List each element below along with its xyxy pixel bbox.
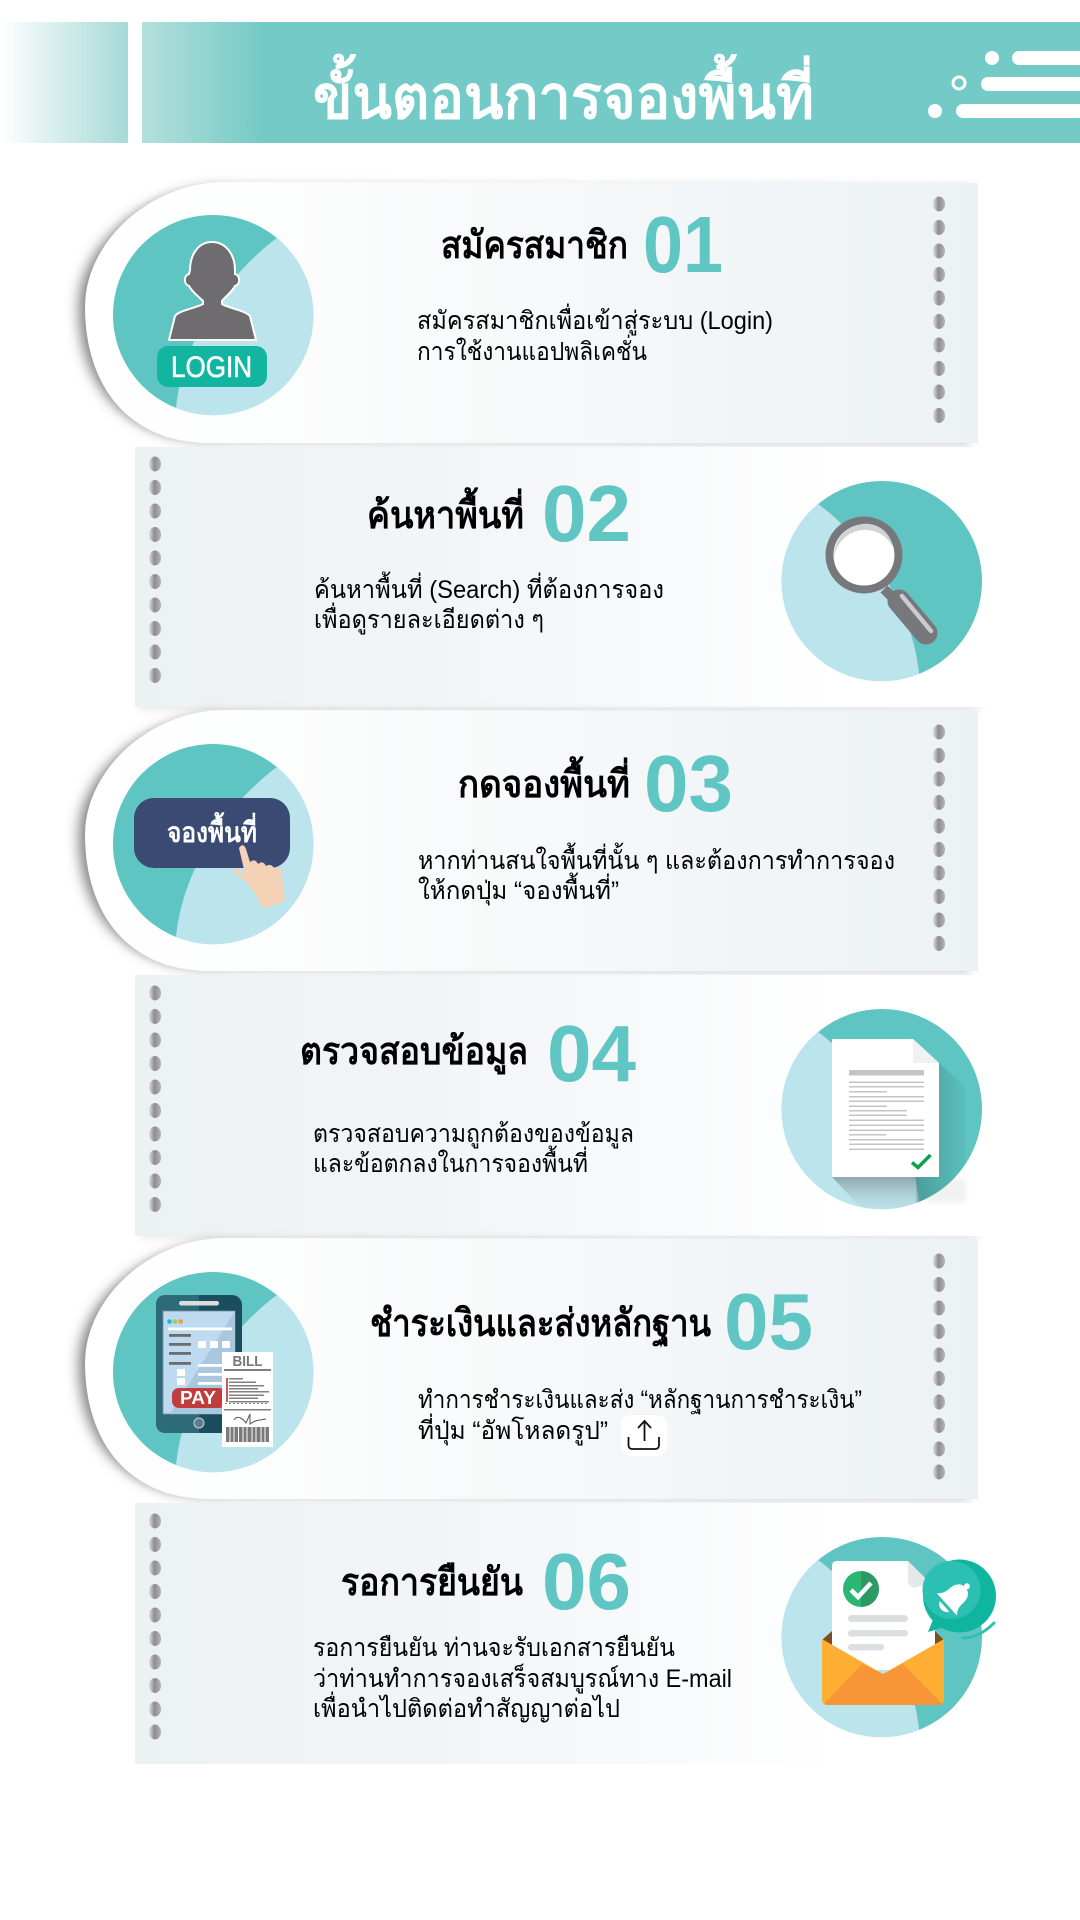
icon: magnifier	[781, 481, 982, 681]
body text 04: ตรวจสอบความถูกต้องของข้อมูล	[313, 1120, 634, 1149]
body text 06	[313, 1634, 732, 1723]
body text 04: และข้อตกลงในการจองพื้นที่	[313, 1145, 588, 1178]
phone: PAY	[180, 1388, 216, 1408]
body text 02: ค้นหาพื้นที่ (Search) ที่ต้องการจอง	[314, 571, 664, 604]
card 6 background	[135, 1503, 990, 1764]
body text 01	[417, 303, 773, 366]
card 3 binder holes	[933, 724, 945, 951]
heading 02: ค้นหาพื้นที่	[367, 487, 524, 537]
heading 03: กดจองพื้นที่	[458, 756, 630, 806]
card 4 binder holes	[149, 986, 161, 1212]
body text 01: สมัครสมาชิกเพื่อเข้าสู่ระบบ (Login)	[417, 303, 773, 336]
bill	[222, 1352, 273, 1447]
panel: step 05	[78, 1238, 978, 1502]
phone	[156, 1295, 242, 1433]
panel: step 02	[135, 447, 990, 710]
header banner	[0, 22, 1080, 143]
icon: decorative list	[928, 51, 1080, 118]
icon: upload	[621, 1415, 667, 1456]
card 1 binder holes	[933, 196, 945, 423]
bill: BILL	[232, 1353, 262, 1370]
panel: step 01	[78, 182, 978, 446]
icon: phone payment and bill	[113, 1272, 314, 1472]
heading 06: รอการยืนยัน	[341, 1562, 523, 1604]
number 05: 05	[724, 1277, 813, 1366]
icon: booking button with hand	[113, 744, 314, 944]
card 3 background	[78, 710, 978, 974]
bell badge	[922, 1560, 996, 1638]
card 6 binder holes	[149, 1514, 161, 1740]
body text 03: หากท่านสนใจพื้นที่นั้น ๆ และต้องการทำการจอง	[418, 842, 895, 875]
body text 06: เพื่อนำไปติดต่อทำสัญญาต่อไป	[313, 1691, 620, 1723]
icon: booking button with hand: จองพื้นที่	[167, 811, 257, 848]
card 1 background	[78, 182, 978, 446]
heading 05: ชำระเงินและส่งหลักฐาน	[370, 1303, 711, 1348]
card 2 binder holes	[149, 456, 161, 683]
icon: envelope letter and bell	[781, 1537, 996, 1737]
banner main bar	[142, 22, 1080, 143]
number 03: 03	[644, 739, 733, 828]
number 01: 01	[643, 200, 723, 289]
icon: login user: LOGIN	[171, 351, 252, 384]
body text 05	[418, 1386, 862, 1446]
body text 03: ให้กดปุ่ม “จองพื้นที่”	[418, 872, 619, 906]
heading 01: สมัครสมาชิก	[441, 225, 628, 267]
number 06: 06	[542, 1537, 631, 1626]
number 04: 04	[547, 1009, 637, 1098]
body text 02	[314, 571, 664, 635]
body text 05: ทำการชำระเงินและส่ง “หลักฐานการชำระเงิน”	[418, 1386, 862, 1414]
body text 05: ที่ปุ่ม “อัพโหลดรูป”	[418, 1413, 608, 1446]
card 5 binder holes	[933, 1254, 945, 1480]
body text 02: เพื่อดูรายละเอียดต่าง ๆ	[314, 602, 544, 635]
banner fade block	[0, 22, 128, 143]
card 5 background	[78, 1238, 978, 1502]
body text 03	[418, 842, 895, 906]
body text 01: การใช้งานแอปพลิเคชั่น	[417, 334, 647, 366]
body text 06: ว่าท่านทำการจองเสร็จสมบูรณ์ทาง E-mail	[313, 1663, 732, 1694]
card 2 background	[135, 447, 990, 710]
panel: step 06	[135, 1503, 996, 1764]
title: ขั้นตอนการจองพื้นที่	[313, 53, 814, 131]
panel: step 04	[135, 975, 990, 1238]
heading 04: ตรวจสอบข้อมูล	[300, 1031, 528, 1075]
body text 04	[313, 1120, 634, 1178]
icon: login user	[113, 215, 314, 415]
number 02: 02	[542, 469, 631, 558]
panel: step 03	[78, 710, 978, 974]
card 4 background	[135, 975, 990, 1238]
body text 06: รอการยืนยัน ท่านจะรับเอกสารยืนยัน	[313, 1634, 675, 1662]
icon: document with check	[781, 1009, 982, 1215]
